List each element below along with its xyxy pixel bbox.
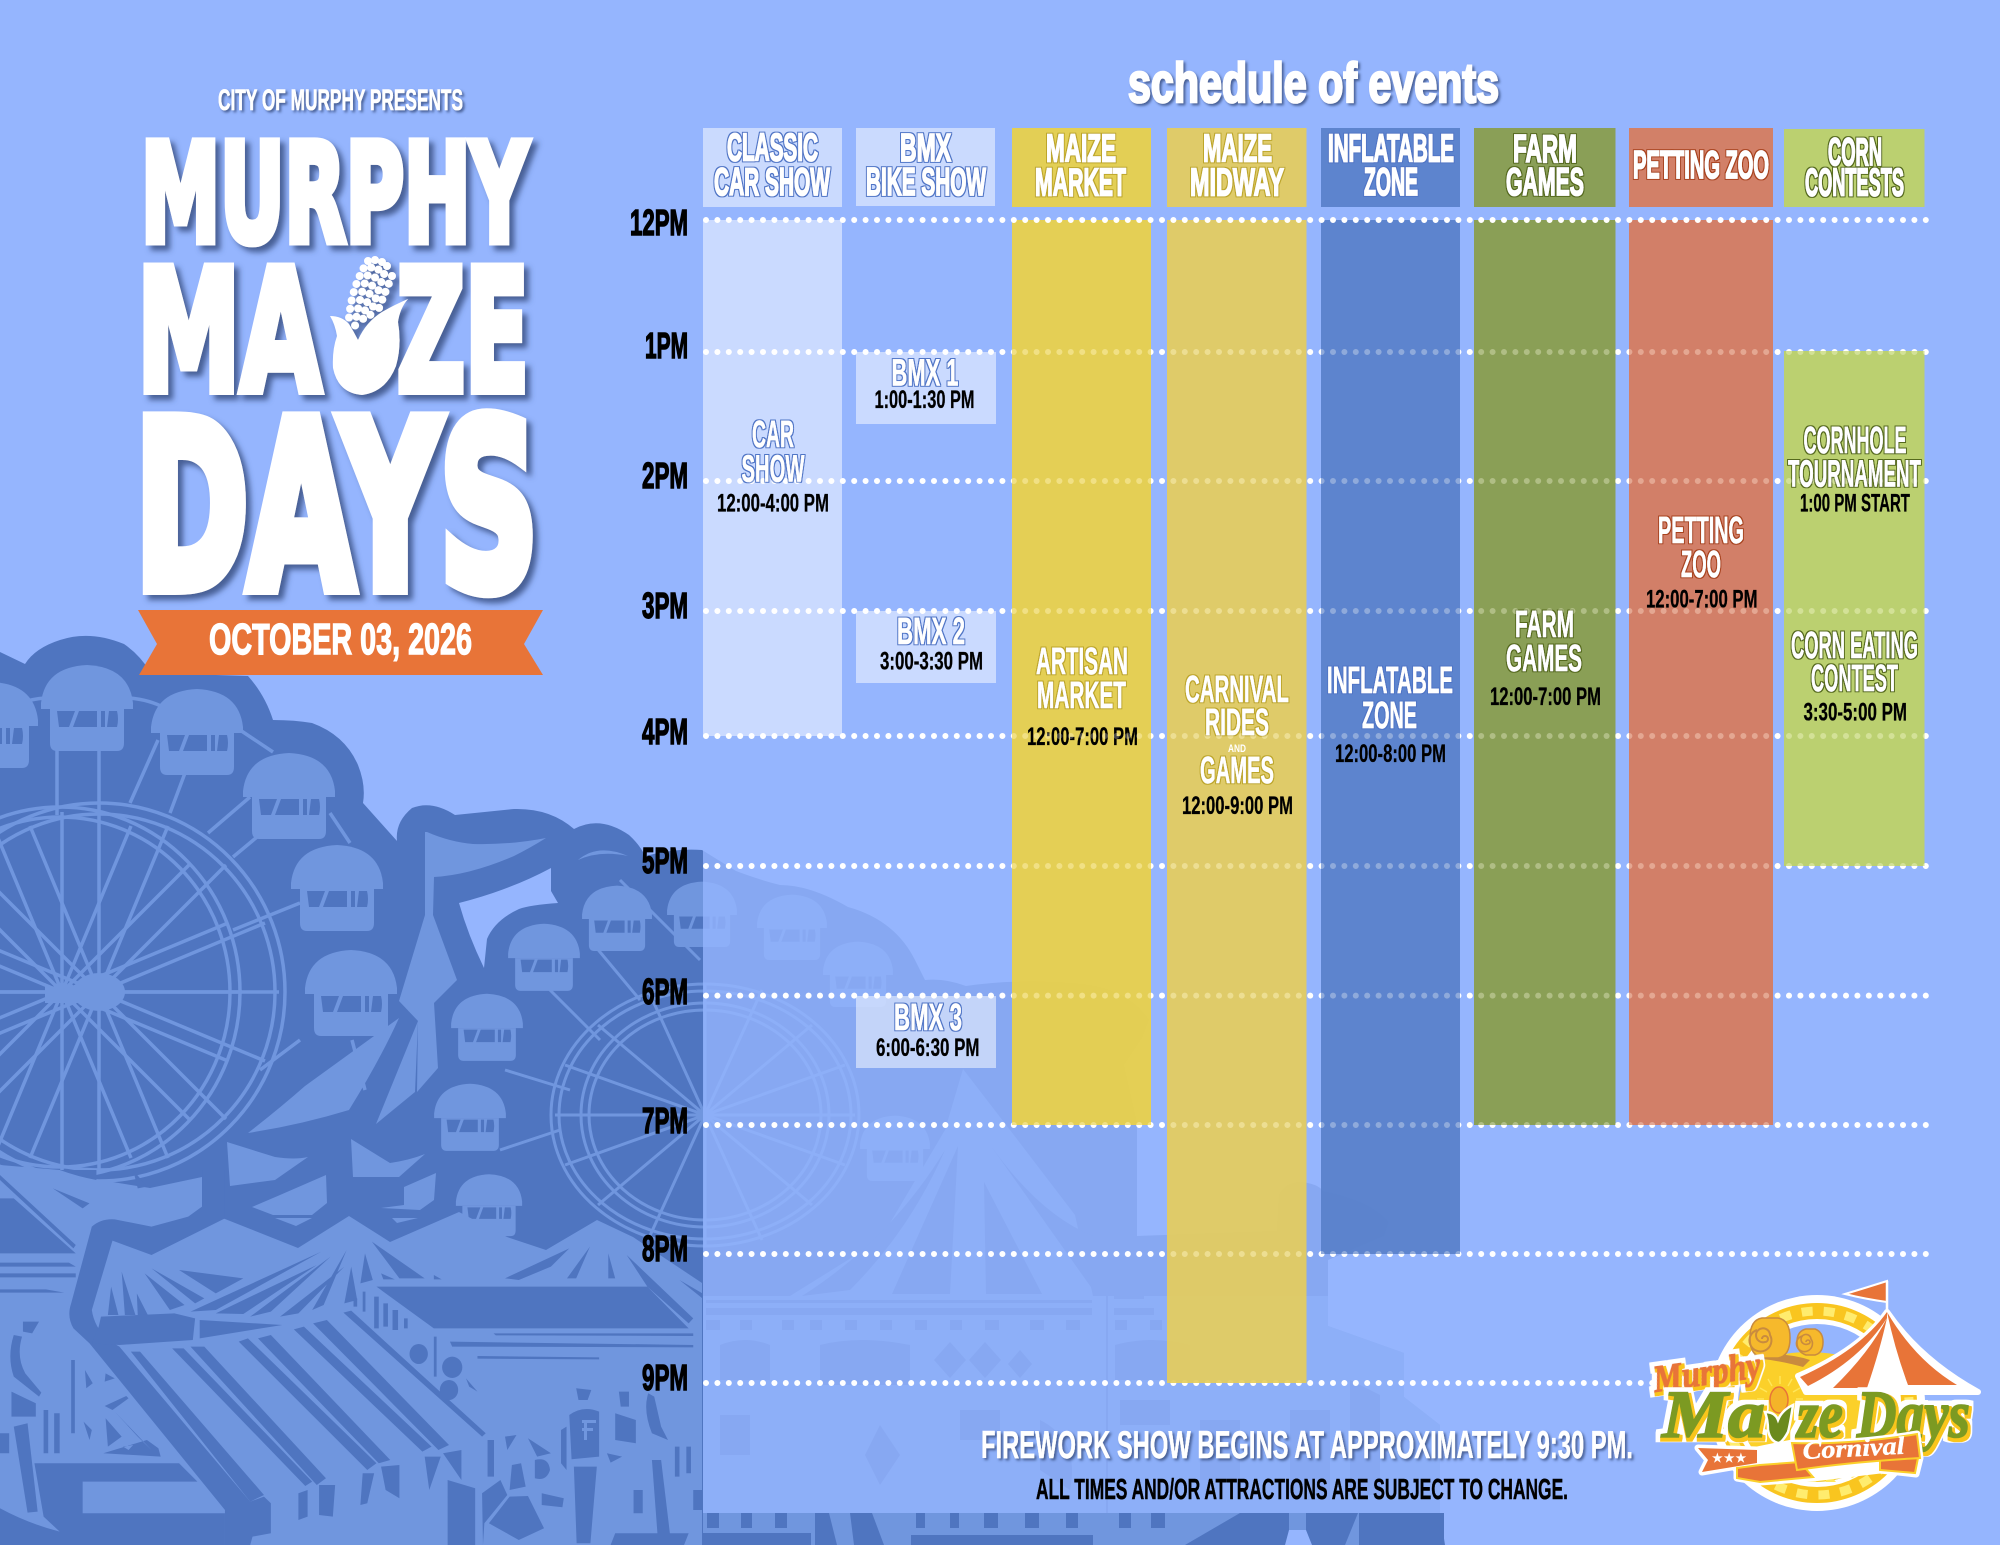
event title: murphy maize days: MA bbox=[137, 234, 321, 430]
event: car show: SHOW bbox=[742, 449, 805, 491]
event: carnival rides and games: CARNIVAL bbox=[1185, 669, 1289, 711]
event: inflatable zone: ZONE bbox=[1362, 695, 1417, 737]
header: bmx bike show bbox=[856, 127, 995, 206]
crowd on right bbox=[448, 1435, 564, 1545]
event title: murphy maize days: DAYS bbox=[135, 375, 538, 642]
event: bmx 3: 6:00-6:30 PM bbox=[876, 1035, 980, 1062]
header: inflatable zone bbox=[1321, 128, 1460, 207]
event: car show bbox=[703, 220, 842, 736]
tent tops and lower grounds bbox=[0, 832, 702, 1545]
event: artisan market: MARKET bbox=[1037, 675, 1126, 717]
column: petting zoo bbox=[1629, 128, 1773, 1125]
centre fan bbox=[191, 1242, 442, 1317]
footer note: disclaimer: ALL TIMES AND/OR ATTRACTIONS ARE SUBJECT TO CHANGE. bbox=[1036, 1474, 1568, 1506]
ferris wheel one gondolas bbox=[0, 665, 397, 1036]
event: farm games bbox=[1474, 220, 1616, 1125]
event: artisan market: ARTISAN bbox=[1036, 641, 1128, 683]
column: classic car show bbox=[703, 127, 842, 736]
event: cornhole tournament and corn eating contest: 3:30-5:00 PM bbox=[1804, 700, 1907, 726]
logo ribbon: Cornival bbox=[1802, 1433, 1905, 1465]
scalloped vent bbox=[354, 1292, 408, 1330]
header: maize market bbox=[1012, 128, 1151, 207]
event: inflatable zone: 12:00-8:00 PM bbox=[1335, 741, 1446, 768]
logo corn bbox=[1757, 1376, 1803, 1443]
base with square vents bbox=[0, 1463, 225, 1545]
header: inflatable zone: INFLATABLE bbox=[1328, 128, 1454, 171]
icon: corn cob replacing letter I bbox=[330, 260, 408, 395]
logo ribbon bbox=[1698, 1433, 1920, 1482]
centre tent strips bbox=[802, 1146, 1093, 1296]
group of figures bbox=[607, 1392, 705, 1545]
event: bmx 3 bbox=[856, 996, 996, 1068]
event: bmx 1: 1:00-1:30 PM bbox=[874, 387, 974, 414]
figure with backpack bbox=[561, 1388, 599, 1543]
balloon cluster bbox=[410, 1344, 428, 1364]
tent and flag bbox=[1798, 1281, 1978, 1392]
event: cornhole tournament and corn eating contest: 1:00 PM START bbox=[1800, 491, 1910, 518]
grid dots showing through blocks bbox=[706, 352, 1926, 1254]
person on left bbox=[0, 1322, 60, 1513]
logo ribbon: ★★★ bbox=[1712, 1451, 1747, 1465]
event: bmx 3: BMX 3 bbox=[894, 997, 962, 1039]
long roof and shadows bbox=[376, 1247, 702, 1359]
header: farm games: FARM bbox=[1513, 128, 1577, 171]
header: petting zoo: PETTING ZOO bbox=[1633, 144, 1769, 187]
ferris wheel one hub bbox=[45, 973, 125, 1011]
schedule heading: schedule of events bbox=[1128, 51, 1499, 114]
event: cornhole tournament and corn eating contest bbox=[1784, 351, 1924, 866]
event: inflatable zone bbox=[1321, 220, 1460, 1254]
column: maize midway bbox=[1167, 128, 1306, 1383]
event: bmx 2: 3:00-3:30 PM bbox=[880, 648, 983, 676]
header: corn contests bbox=[1784, 129, 1924, 207]
event: bmx 1: BMX 1 bbox=[892, 353, 958, 395]
event: carnival rides and games: AND bbox=[1228, 743, 1246, 755]
logo word: murphy: Murphy bbox=[1650, 1344, 1763, 1401]
event: bmx 1 bbox=[856, 352, 996, 424]
header: classic car show: CLASSIC bbox=[727, 127, 818, 170]
event title: murphy maize days: MURPHY bbox=[141, 116, 529, 274]
header: bmx bike show: BIKE SHOW bbox=[866, 161, 986, 204]
hour labels: 9PM bbox=[642, 1357, 688, 1398]
hour labels: 1PM bbox=[645, 325, 688, 366]
event title: murphy maize days: ZE bbox=[397, 234, 529, 430]
header: maize market: MAIZE bbox=[1046, 128, 1116, 171]
backpack lettering bbox=[582, 1420, 596, 1440]
column: maize market bbox=[1012, 128, 1151, 1125]
hour labels: 3PM bbox=[642, 585, 688, 626]
event: carnival rides and games: 12:00-9:00 PM bbox=[1182, 793, 1293, 820]
noon grid line bbox=[706, 217, 1926, 223]
dark silhouette bbox=[0, 636, 1445, 1545]
ferris wheel two bbox=[500, 880, 859, 1246]
column: bmx bike show bbox=[856, 127, 996, 1068]
centre tent bbox=[790, 1069, 1093, 1296]
event: car show: CAR bbox=[752, 414, 794, 456]
event: petting zoo: ZOO bbox=[1681, 544, 1721, 586]
header: maize midway: MAIZE bbox=[1203, 128, 1272, 171]
header: bmx bike show: BMX bbox=[900, 127, 951, 170]
event: carnival rides and games: RIDES bbox=[1205, 702, 1269, 744]
thick tent outline bbox=[69, 1170, 271, 1545]
left dark wedges and stripes bbox=[0, 1170, 147, 1293]
event: petting zoo bbox=[1629, 220, 1773, 1125]
date ribbon: OCTOBER 03, 2026 bbox=[209, 615, 472, 664]
stall on left bbox=[71, 1360, 161, 1457]
illustration: carnival silhouette with ferris wheels and tents bbox=[0, 636, 2000, 1545]
presents line: CITY OF MURPHY PRESENTS bbox=[218, 84, 463, 117]
grounds line work bbox=[0, 1170, 705, 1545]
event: farm games: GAMES bbox=[1506, 638, 1582, 680]
hour labels: 7PM bbox=[642, 1100, 688, 1141]
ferris wheel one bbox=[0, 698, 365, 1181]
canopy stripes bbox=[131, 1311, 486, 1502]
header: classic car show bbox=[703, 127, 842, 207]
hour labels: 2PM bbox=[642, 455, 688, 496]
event: farm games: 12:00-7:00 PM bbox=[1490, 684, 1601, 711]
hour labels: 6PM bbox=[642, 971, 688, 1012]
header: farm games: GAMES bbox=[1506, 161, 1584, 204]
hour labels: 5PM bbox=[642, 840, 688, 881]
band under fans bbox=[92, 1313, 282, 1345]
header: maize market: MARKET bbox=[1035, 162, 1126, 204]
event: carnival rides and games: GAMES bbox=[1200, 750, 1274, 792]
hour labels bbox=[630, 202, 688, 1398]
event: petting zoo: PETTING bbox=[1658, 510, 1744, 552]
column: inflatable zone bbox=[1321, 128, 1460, 1254]
header: corn contests: CORN bbox=[1828, 131, 1882, 174]
header: inflatable zone: ZONE bbox=[1364, 161, 1418, 204]
bottom strip squares and bands bbox=[703, 1513, 1444, 1545]
sky gap under flag bbox=[459, 868, 558, 968]
pale overlay bbox=[703, 840, 2000, 1513]
date ribbon bbox=[138, 610, 543, 675]
hour labels: 12PM bbox=[630, 202, 688, 243]
ferris wheel two gondolas bbox=[434, 882, 930, 1236]
event: farm games: FARM bbox=[1515, 604, 1574, 646]
sky beyond carousel bbox=[1285, 1513, 2000, 1545]
event: inflatable zone: INFLATABLE bbox=[1327, 660, 1453, 702]
header: classic car show: CAR SHOW bbox=[714, 161, 830, 204]
event: bmx 2 bbox=[856, 611, 996, 683]
left fan bbox=[108, 1268, 243, 1315]
hay bales bbox=[1745, 1318, 1823, 1367]
carousel ornaments bbox=[706, 1296, 1380, 1513]
carousel body bbox=[703, 1296, 1440, 1545]
canopy fringe bbox=[298, 1450, 461, 1520]
event: artisan market bbox=[1012, 220, 1151, 1125]
event: bmx 2: BMX 2 bbox=[897, 611, 965, 653]
event: cornhole tournament and corn eating contest: CONTEST bbox=[1811, 658, 1898, 700]
hour grid lines bbox=[706, 352, 1926, 1383]
column: corn contests bbox=[1784, 129, 1924, 866]
column: farm games bbox=[1474, 128, 1616, 1125]
event: carnival rides and games bbox=[1167, 220, 1306, 1383]
event: petting zoo: 12:00-7:00 PM bbox=[1646, 586, 1758, 614]
hour labels: 8PM bbox=[642, 1228, 688, 1269]
event: car show: 12:00-4:00 PM bbox=[717, 491, 829, 518]
header: farm games bbox=[1474, 128, 1616, 207]
header: maize midway: MIDWAY bbox=[1190, 162, 1284, 204]
event title: murphy maize days bbox=[135, 116, 538, 642]
lower art strip behind overlay bbox=[703, 1069, 1444, 1545]
header: maize midway bbox=[1167, 128, 1306, 207]
header: petting zoo bbox=[1629, 128, 1773, 207]
logo: murphy maize days cornival bbox=[1650, 1281, 1978, 1511]
flag cut-outs in dark tent outlines bbox=[252, 1173, 436, 1226]
hour labels: 4PM bbox=[642, 711, 688, 752]
logo ring bbox=[1709, 1295, 1925, 1511]
logo word: maize days start: Ma bbox=[1661, 1376, 1765, 1452]
event: artisan market: 12:00-7:00 PM bbox=[1027, 724, 1138, 751]
